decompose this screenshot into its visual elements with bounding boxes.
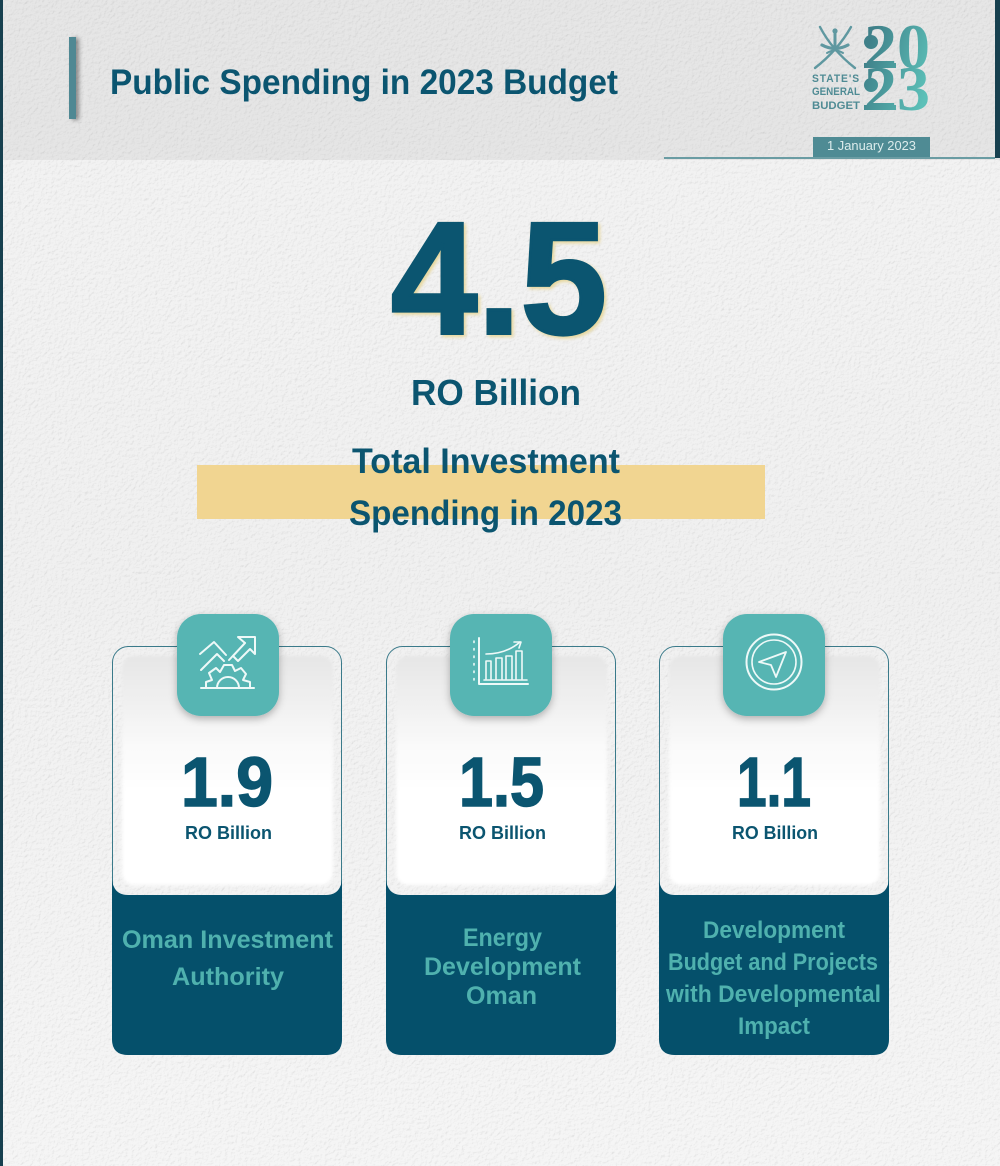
label bbox=[122, 926, 334, 991]
label: Development bbox=[703, 917, 845, 944]
label: Budget and Projects bbox=[668, 949, 878, 976]
header bbox=[69, 37, 618, 119]
date tag bbox=[664, 137, 995, 159]
unit: RO Billion bbox=[185, 823, 272, 843]
logo caption: BUDGET bbox=[812, 100, 860, 112]
headline unit: RO Billion bbox=[411, 372, 581, 413]
headline figure: 4.5 bbox=[391, 188, 607, 368]
logo year numerals: 20 bbox=[864, 12, 930, 82]
logo caption bbox=[812, 73, 860, 112]
label: Energy bbox=[463, 924, 542, 952]
title: Public Spending in 2023 Budget bbox=[110, 63, 618, 102]
value: 1.5 bbox=[459, 743, 544, 821]
label: Development bbox=[424, 953, 582, 981]
card: Oman Investment Authority bbox=[112, 614, 342, 1055]
icon: compass navigation bbox=[723, 614, 825, 716]
unit: RO Billion bbox=[732, 823, 818, 843]
label bbox=[424, 924, 582, 1010]
highlighted caption: Spending in 2023 bbox=[349, 494, 622, 533]
header accent bar bbox=[69, 37, 76, 119]
logo: State's General Budget 2023 bbox=[812, 12, 930, 124]
icon: bar chart with rising arrow bbox=[450, 614, 552, 716]
card: Energy Development Oman bbox=[386, 614, 616, 1055]
label: Authority bbox=[172, 963, 284, 991]
label bbox=[665, 917, 881, 1040]
label: Impact bbox=[738, 1013, 810, 1040]
value: 1.9 bbox=[181, 743, 273, 821]
label: Oman bbox=[466, 982, 537, 1010]
card: Development Budget and Projects bbox=[659, 614, 889, 1055]
unit: RO Billion bbox=[459, 823, 546, 843]
logo year numerals: 23 bbox=[864, 54, 930, 124]
label: Oman Investment bbox=[122, 926, 334, 954]
value: 1.1 bbox=[737, 743, 811, 821]
label: with Developmental bbox=[665, 981, 881, 1008]
icon: growth arrow and gear bbox=[177, 614, 279, 716]
icon: Omani emblem bbox=[815, 27, 855, 68]
logo caption: GENERAL bbox=[812, 86, 860, 98]
logo year numerals bbox=[864, 12, 930, 124]
highlighted caption: Total Investment bbox=[352, 442, 620, 481]
date tag: 1 January 2023 bbox=[827, 139, 916, 153]
highlighted caption bbox=[197, 442, 765, 533]
logo caption: STATE'S bbox=[812, 73, 860, 85]
